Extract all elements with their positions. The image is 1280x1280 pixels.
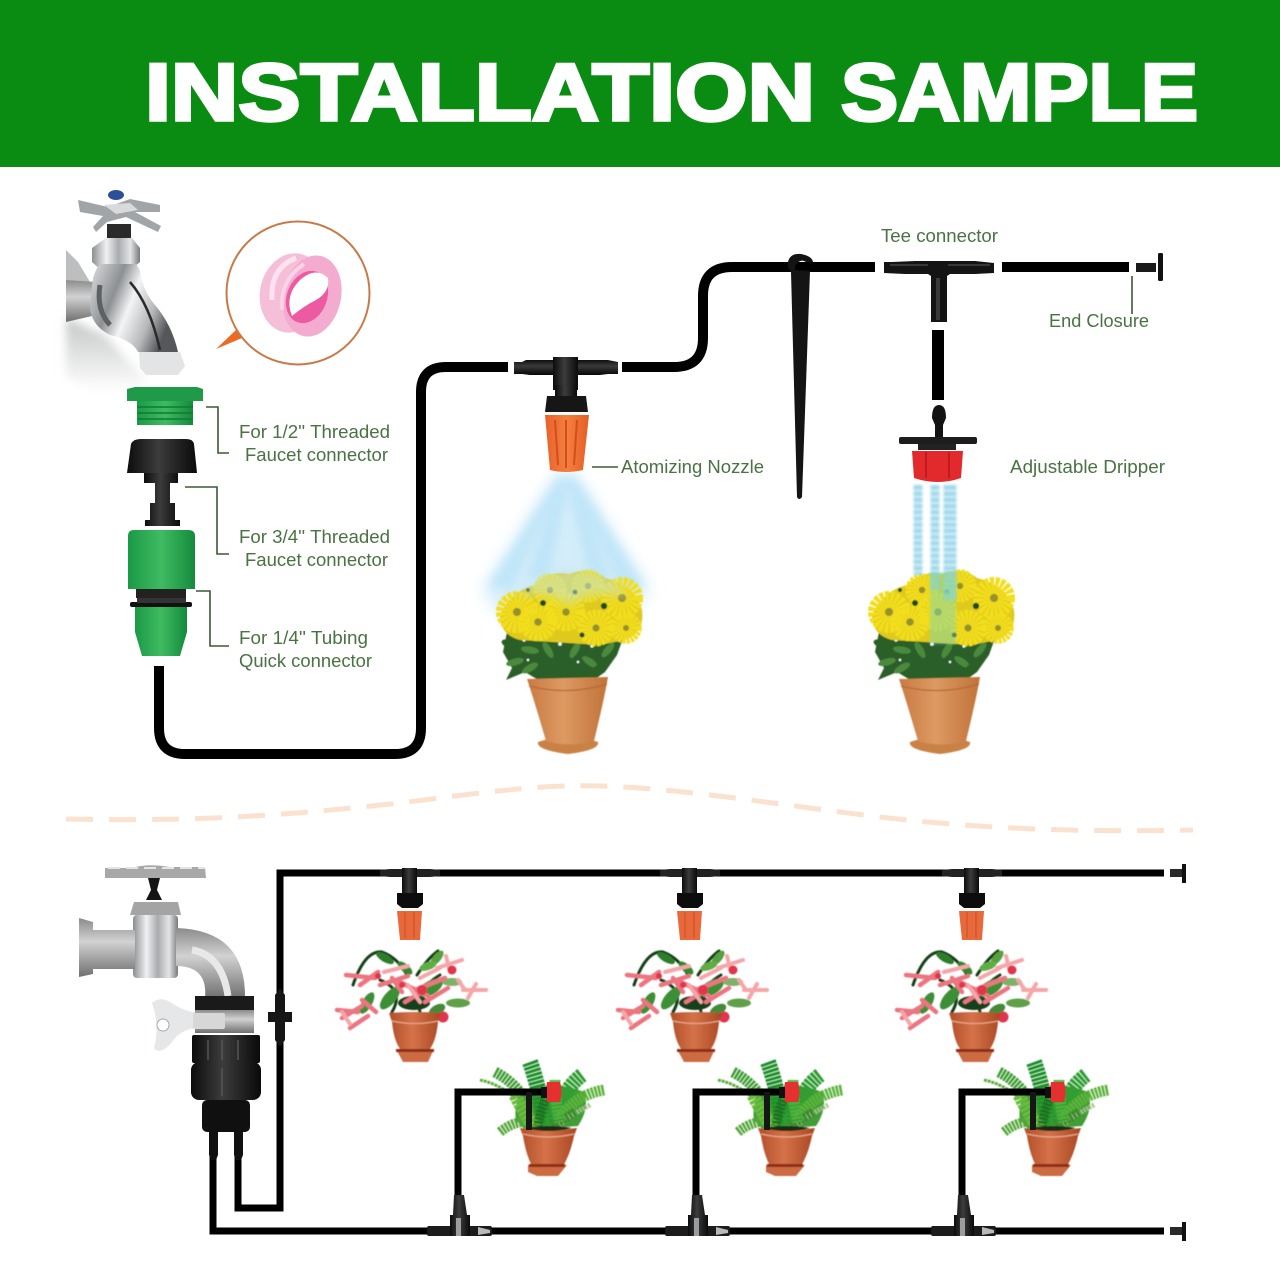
plant: pink flowers two (618, 949, 767, 1062)
label: tee connector: Tee connector (881, 226, 998, 246)
callout: quarter inch tubing connector (196, 591, 372, 671)
icon: silver faucet with splitter (79, 865, 261, 1160)
callout: quarter inch tubing connector: Quick connector (239, 651, 372, 671)
plant: pink flowers three (897, 949, 1046, 1062)
callout: half inch connector: Faucet connector (245, 445, 388, 465)
title: INSTALLATION (145, 48, 815, 138)
header banner (0, 0, 1280, 167)
main tube (159, 267, 1129, 754)
callout: end closure: End Closure (1049, 311, 1149, 331)
title (145, 48, 1198, 138)
callout: half inch connector (206, 407, 390, 465)
water streams (918, 485, 950, 600)
icon: adjustable dripper (899, 405, 977, 482)
icon: nozzle one (380, 868, 440, 940)
callout: three quarter inch connector: For 3/4'' Threaded (239, 527, 390, 547)
tee one (427, 1195, 492, 1236)
title: SAMPLE (841, 48, 1198, 138)
plant: fern two (718, 1062, 842, 1176)
icon: green quick connector (128, 530, 195, 656)
callout: three quarter inch connector: Faucet connector (245, 550, 388, 570)
icon: inline coupling (268, 988, 292, 1047)
icon: chrome faucet (66, 190, 185, 392)
callout: atomizing nozzle: Atomizing Nozzle (621, 457, 764, 477)
icon: nozzle two (660, 868, 720, 940)
water over flowers (930, 572, 956, 644)
dripper branch one (458, 1082, 562, 1228)
panel: dual line setup (79, 864, 1186, 1241)
plant: yellow flowers under dripper (872, 571, 1014, 754)
panel: single line setup (66, 190, 1165, 754)
callout: half inch connector: For 1/2'' Threaded (239, 422, 390, 442)
callout: quarter inch tubing connector: For 1/4'' Tubing (239, 628, 368, 648)
callout: end closure (1049, 276, 1149, 331)
icon: end closure (1136, 253, 1163, 281)
icon: lower end closure (1170, 1222, 1186, 1241)
callout: adjustable dripper: Adjustable Dripper (1010, 457, 1165, 477)
icon: black faucet connector (127, 439, 197, 526)
icon: green threaded adapter (127, 387, 203, 425)
icon: teflon tape callout (216, 222, 370, 364)
mist over flowers (515, 570, 628, 606)
tee two (665, 1195, 730, 1236)
icon: atomizing nozzle (514, 357, 618, 472)
icon: nozzle three (942, 868, 1002, 940)
plant: fern three (984, 1062, 1108, 1176)
tubes (213, 873, 1164, 1231)
tee three (931, 1195, 996, 1236)
dripper branch two (696, 1082, 800, 1228)
callout: three quarter inch connector (185, 487, 390, 570)
icon: upper end closure (1170, 864, 1186, 883)
plant: yellow flowers with mist (500, 571, 642, 754)
plant: pink flowers one (337, 949, 486, 1062)
plant: fern one (480, 1062, 604, 1176)
mist spray (482, 474, 650, 625)
icon: tee connector (884, 261, 994, 322)
icon: stake (788, 254, 813, 499)
wavy dashed divider (66, 786, 1193, 831)
dripper branch three (962, 1082, 1066, 1228)
